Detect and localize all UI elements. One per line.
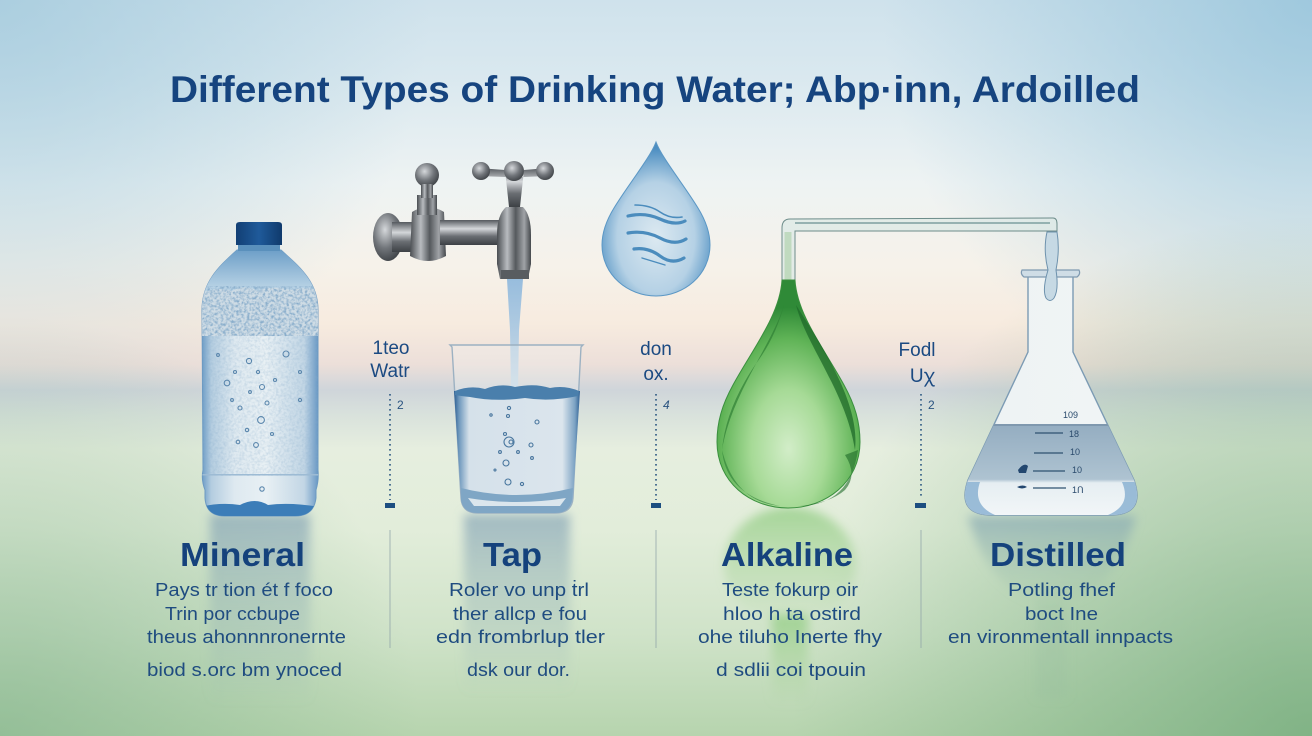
falling distillate [1044,232,1058,300]
water stream [507,279,523,392]
panel: Distilled: en vironmentall innpacts [948,627,1173,647]
icon: distilled water flask: 10 [1072,465,1082,475]
panel: Mineral: biod s.orc bm ynoced [147,660,342,680]
icon: tap faucet [373,161,554,279]
panel: Alkaline: ohe tiluho Inerte fhy [698,627,882,647]
panel: Mineral: Trin por ccbupe [165,604,300,624]
panel: Mineral: theus ahonnnronernte [147,627,346,647]
scale 3 [915,394,935,508]
side label: Fodl: Uꭓ [910,366,936,387]
side label: don ox. [640,339,672,385]
bottle cap [236,222,282,245]
side label: Fodl [899,340,936,387]
glass bubbles [490,406,539,486]
side label: 1teo Water [370,338,410,382]
title: Different Types of Drinking Water; Abp·inn, Ardoilled [170,69,1140,110]
panel: Tap: dsk our dor. [467,660,570,680]
panel: Mineral [147,536,346,680]
scale 3: 2 [928,398,935,412]
faucet pipe [440,220,502,245]
green drop [717,280,860,508]
panel: Alkaline: Teste fokurp oir [722,580,858,600]
panel: Distilled: Distilled [990,536,1126,573]
scale 2: 4 [663,398,670,412]
panel: Tap: Tap [483,536,542,573]
bubbles [217,351,302,491]
faucet cross handle [478,168,548,207]
panel: Alkaline: Alkaline [721,536,853,573]
panel: Alkaline: d sdlii coi tpouin [716,660,866,680]
side label: don ox.: don [640,339,672,360]
side label: don ox.: ox. [643,364,669,385]
panel: Mineral: Pays tr tion ét f foco [155,580,333,600]
column dividers [390,530,921,648]
side label: 1teo Water: 1teo [373,338,409,359]
scale 1 [385,394,404,508]
icon: mineral water bottle [200,222,320,520]
panel: Mineral: Mineral [180,536,305,573]
icon: alkaline green drop with tube [717,218,1057,508]
icon: water drop with waves [602,142,710,296]
icon: glass of water [450,345,583,513]
side label: Fodl: Fodl [899,340,935,361]
panel: Tap [436,536,605,680]
scale 2 [651,394,670,508]
panel: Tap: ther allcp e fou [453,604,587,624]
faucet inlet knob [373,213,403,261]
scale 1: 2 [397,398,404,412]
icon: distilled water flask: 10 [1070,447,1080,457]
icon: distilled water flask: 109 [1063,410,1078,420]
flask measuring marks [1033,433,1066,488]
delivery tube [782,218,1057,290]
faucet spout body [497,207,531,279]
panel: Tap: edn frombrlup tler [436,627,605,647]
reflections of the objects [210,507,1136,705]
panel: Alkaline: hloo h ta ostird [723,604,861,624]
icon: distilled water flask [960,232,1145,516]
icon: distilled water flask: 18 [1069,429,1079,439]
panel: Distilled: Potling fhef [1008,580,1116,600]
panel: Tap: Roler vo unp ṫrl [449,580,589,600]
side label: 1teo Water: Watr [370,361,410,382]
panel: Distilled [948,536,1173,647]
panel: Distilled: boct Ine [1025,604,1098,624]
panel: Alkaline [698,536,882,680]
icon: distilled water flask: 1Ո [1072,485,1084,495]
